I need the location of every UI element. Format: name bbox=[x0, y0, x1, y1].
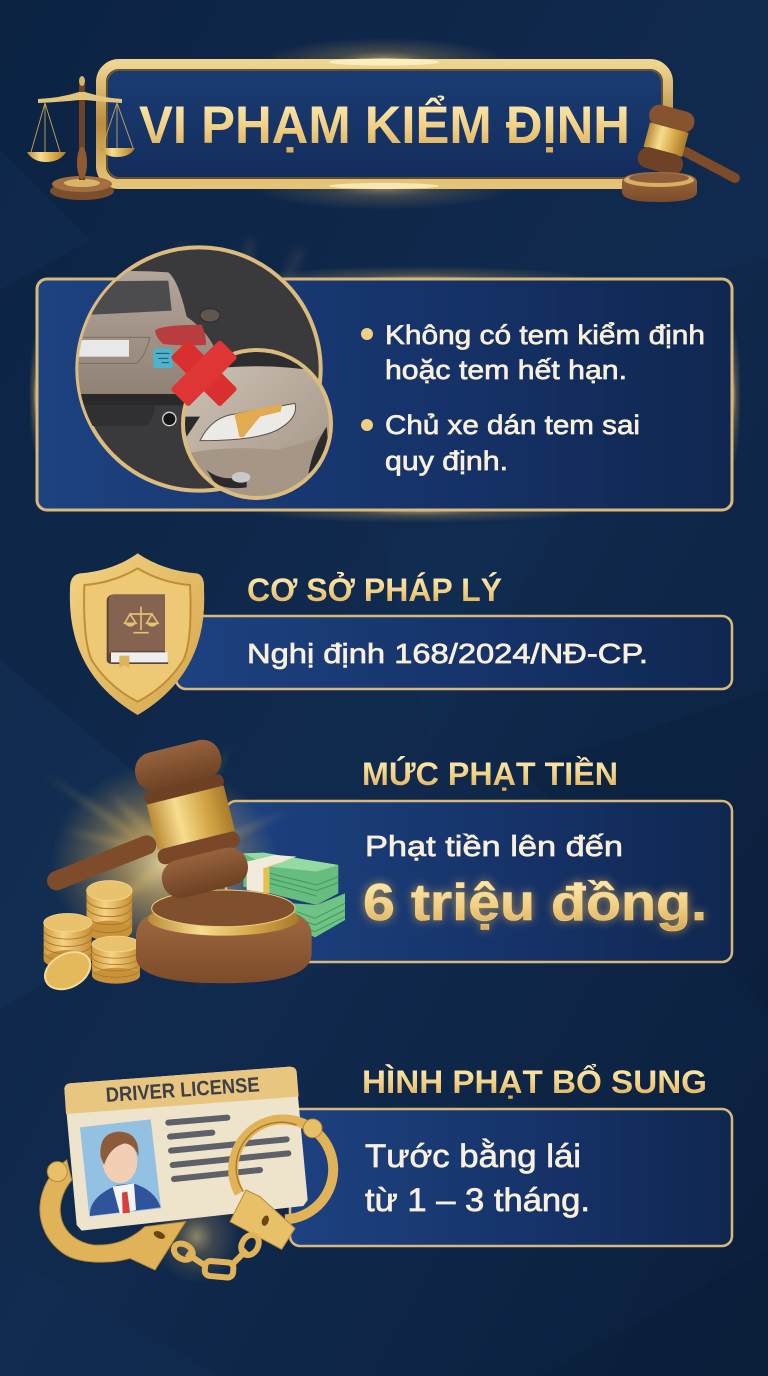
fine amount: 6 triệu đồng. bbox=[363, 874, 707, 932]
panel: fine bbox=[226, 801, 732, 962]
icon: gavel head bbox=[131, 736, 252, 902]
heading: extra penalty: HÌNH PHẠT BỔ SUNG bbox=[362, 1064, 707, 1100]
bullet list: hoặc tem hết hạn. bbox=[385, 355, 627, 385]
heading: legal basis: CƠ SỞ PHÁP LÝ bbox=[247, 572, 502, 608]
bullet list: Không có tem kiểm định bbox=[385, 320, 705, 350]
icon: left handcuff bbox=[40, 1160, 186, 1270]
penalty text bbox=[365, 1138, 590, 1218]
bullet list: quy định. bbox=[385, 446, 508, 476]
penalty text: từ 1 – 3 tháng. bbox=[365, 1182, 590, 1218]
icon: shield with law book bbox=[70, 553, 204, 715]
id photo bbox=[80, 1119, 161, 1217]
penalty text: Tước bằng lái bbox=[365, 1138, 581, 1174]
icon: license card bbox=[64, 1067, 308, 1231]
icon: chain bbox=[171, 1232, 262, 1278]
card title: DRIVER LICENSE bbox=[105, 1073, 260, 1107]
illustration: car sticker violation bbox=[63, 247, 331, 507]
panel: legal basis bbox=[176, 616, 732, 689]
panel: extra penalty bbox=[290, 1109, 732, 1246]
fine intro text: Phạt tiền lên đến bbox=[365, 831, 623, 863]
icon: right handcuff bbox=[230, 1119, 333, 1249]
icon: gavel top right bbox=[622, 102, 735, 202]
car rear bbox=[63, 271, 220, 426]
data lines bbox=[168, 1118, 288, 1179]
icon: scales of justice bbox=[27, 76, 135, 200]
illustration: gavel, coins and money bbox=[37, 736, 345, 997]
illustration: driver license and handcuffs bbox=[40, 1067, 333, 1283]
legal text: Nghị định 168/2024/NĐ-CP. bbox=[247, 638, 648, 669]
bullet list bbox=[361, 320, 705, 476]
title: VI PHẠM KIỂM ĐỊNH bbox=[139, 95, 630, 155]
car front inset bbox=[182, 350, 331, 507]
heading: fine: MỨC PHẠT TIỀN bbox=[362, 756, 618, 792]
icon: red X bbox=[170, 340, 238, 407]
law book bbox=[107, 594, 168, 668]
panel: violation bbox=[29, 266, 741, 523]
icon: money stacks bbox=[243, 853, 345, 937]
icon: sound block bbox=[136, 890, 312, 983]
title banner bbox=[101, 38, 668, 210]
fine amount: 6 triệu đồng. bbox=[363, 874, 707, 932]
bullet list: Chủ xe dán tem sai bbox=[385, 410, 640, 440]
icon: coin stacks bbox=[39, 881, 140, 997]
icon: gavel handle bbox=[57, 845, 147, 881]
